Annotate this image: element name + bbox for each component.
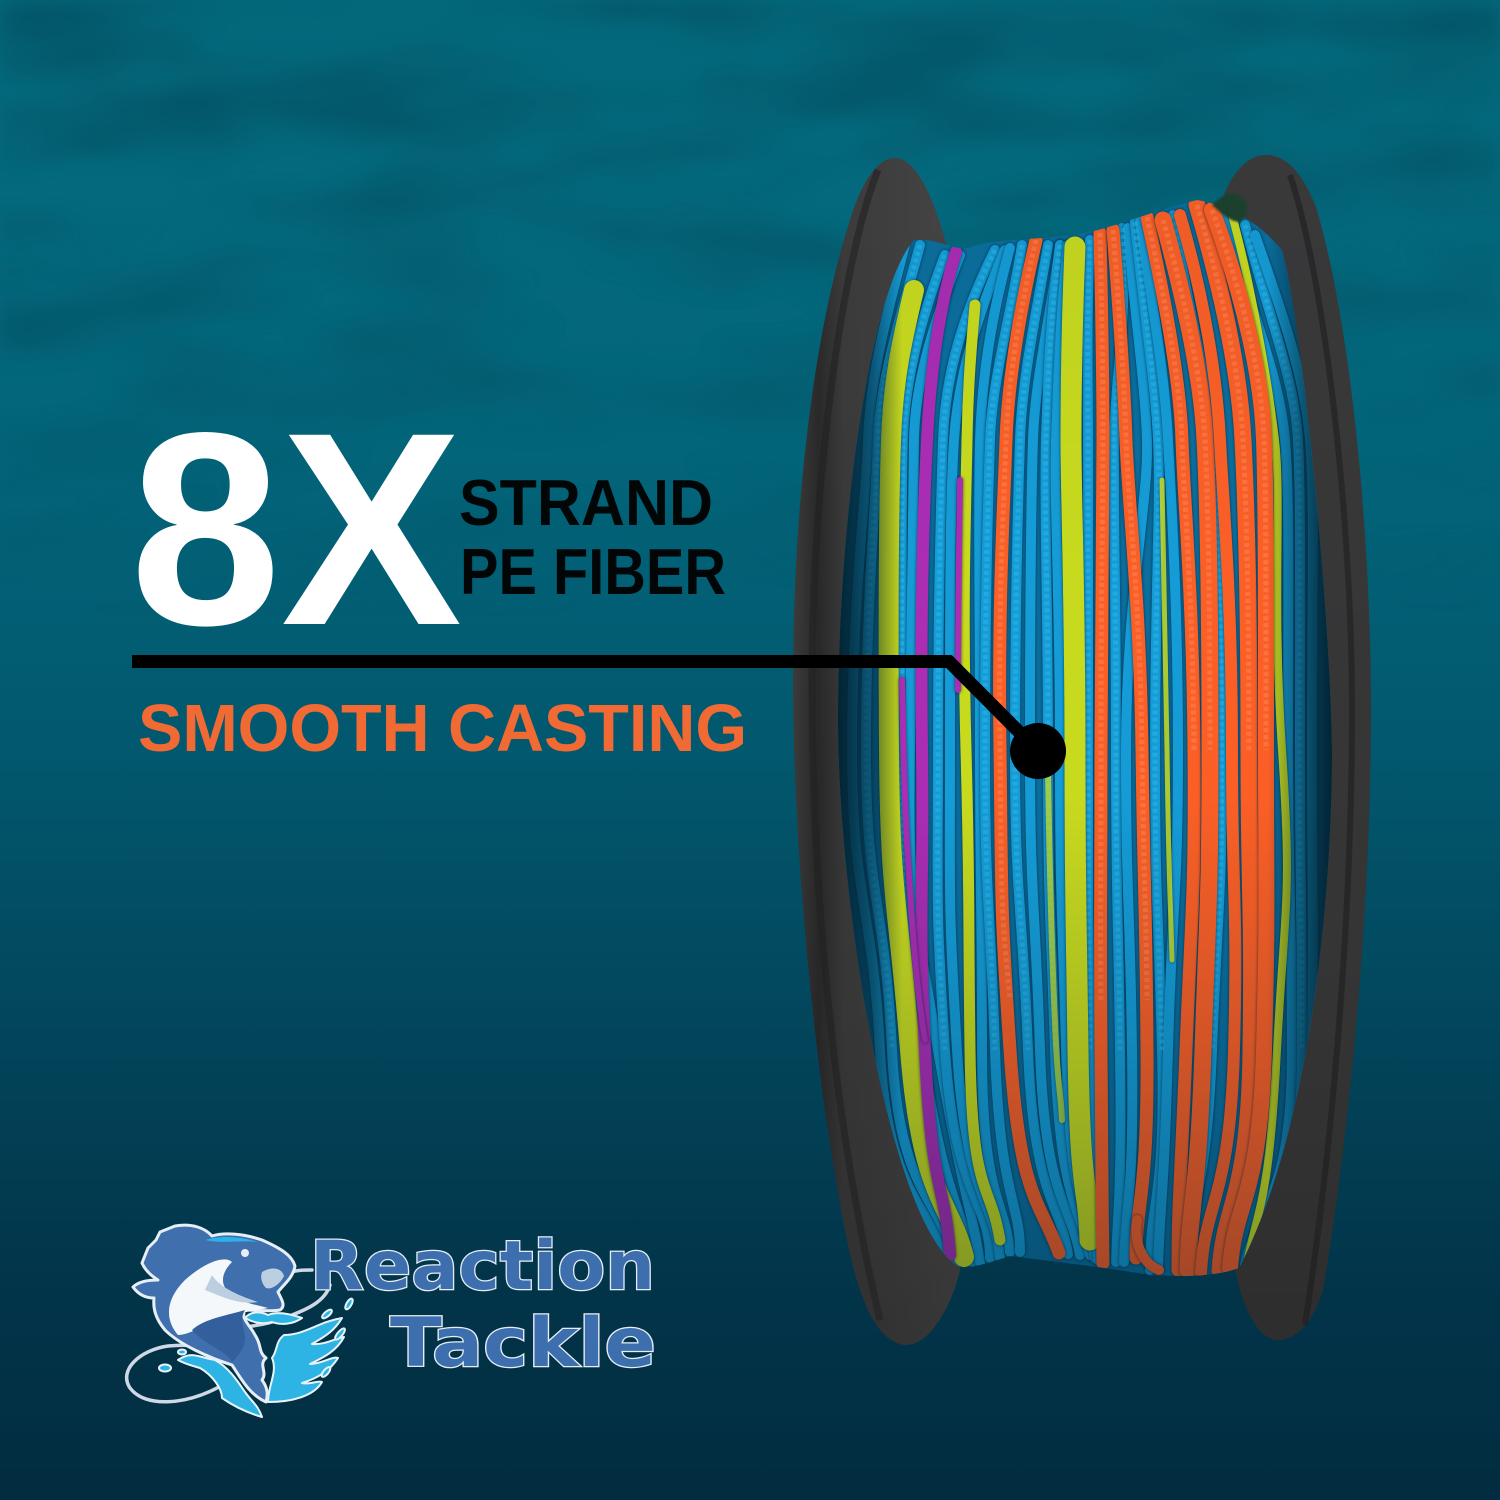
blue strands [852,212,1313,1272]
headline: 8X: 8X [130,376,463,683]
icon: hook line [127,1270,330,1402]
stray tag end at right flange [1212,193,1247,222]
orange strands [1000,205,1266,1273]
sub-heading: strand PE fiber: STRAND [459,466,713,539]
fishing line spool [793,155,1371,1345]
sub-heading: strand PE fiber: PE FIBER [460,535,726,608]
benefit label: smooth casting: SMOOTH CASTING [138,691,747,766]
icon: leaping bass [133,1225,295,1402]
bright blue braid highlights [866,215,1302,1050]
logo wordmark: Tackle [390,1304,656,1383]
spool right flange [1222,155,1371,1340]
yellow strands [889,215,1287,1263]
spool depth shading [869,200,1312,1276]
logo wordmark: Reaction [310,1227,655,1306]
callout line with dot [132,662,1066,779]
orange braid highlights [1000,205,1266,1000]
icon: water splash [159,1298,354,1417]
wound braided line [830,195,1340,1285]
spool left flange [793,158,960,1345]
purple strands [902,252,960,1255]
logo wordmark [310,1227,656,1383]
logo: Reaction Tackle [127,1225,656,1417]
sub-heading: strand PE fiber [459,466,726,608]
